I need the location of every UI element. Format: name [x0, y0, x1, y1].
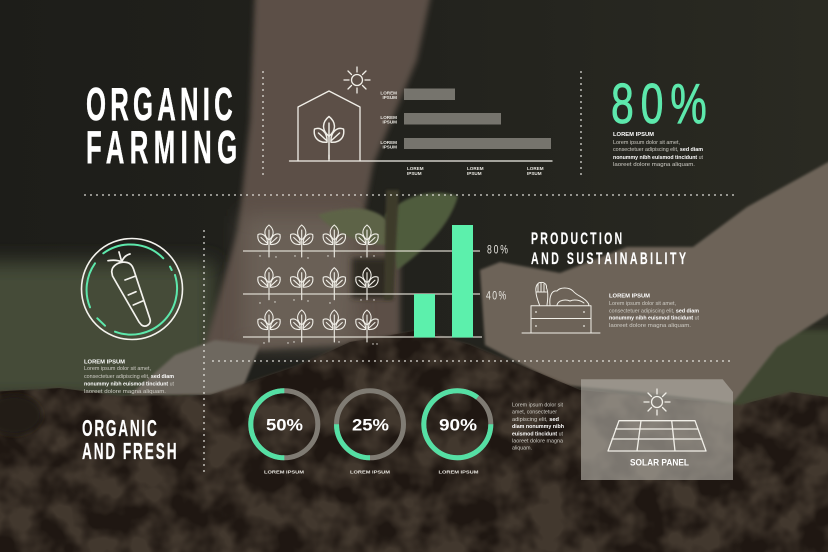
text block: carrot description: nonummy nibh euismod tincidunt ut	[84, 382, 174, 388]
plant rows	[258, 225, 378, 342]
soil dots	[259, 255, 378, 345]
axis labels: IPSUM	[407, 171, 422, 176]
text block: production description: Lorem ipsum dolor sit amet,	[609, 301, 676, 307]
chart: greenhouse horizontal bars	[290, 67, 552, 176]
text block: 80% description: nonummy nibh euismod tincidunt ut	[613, 155, 703, 161]
text block: carrot description	[84, 360, 174, 395]
icon: sun	[644, 389, 670, 415]
text block: solar description: amet, consectetuer	[512, 410, 557, 416]
carrot	[112, 262, 150, 326]
chart: plant pictogram grid with vertical bars	[243, 225, 508, 345]
green dashed ring	[87, 244, 177, 335]
axis labels	[486, 244, 508, 303]
heading: Organic and Fresh	[82, 416, 177, 465]
icon: vegetable crate	[522, 282, 600, 333]
text block: production description	[609, 294, 699, 329]
icon: carrot badge	[82, 238, 182, 340]
text block: solar description	[512, 402, 564, 452]
text block: solar description: euismod tincidunt ut	[512, 431, 563, 437]
bar labels: IPSUM	[382, 120, 397, 124]
heading: Organic and Fresh: ORGANIC	[82, 416, 157, 442]
green bars	[414, 225, 473, 338]
text block: solar description: Lorem ipsum dolor sit	[512, 402, 563, 408]
title: Organic Farming: ORGANIC	[86, 78, 233, 130]
axis labels: IPSUM	[467, 171, 482, 176]
text block: production description: LOREM IPSUM	[609, 294, 650, 300]
text block: production description: consectetuer adipiscing elit, sed diam	[609, 308, 699, 314]
title: Organic Farming: FARMING	[86, 121, 237, 173]
icon: sun	[344, 67, 370, 93]
heading: Production and Sustainability	[531, 228, 686, 268]
text block: solar description: diam nonummy nibh	[512, 424, 564, 430]
axis labels: 40%	[486, 290, 506, 303]
text block: solar description: laoreet dolore magna	[512, 439, 563, 445]
gridlines	[243, 251, 482, 337]
donut: 90%: LOREM IPSUM	[438, 470, 479, 474]
bar labels: IPSUM	[382, 144, 397, 150]
donut: 50%: 50%	[266, 416, 303, 434]
bar labels: LOREM	[380, 90, 397, 96]
panel: solar panel	[581, 379, 733, 480]
text block: solar description: adipiscing elit, sed	[512, 417, 559, 423]
icon: greenhouse with plant	[298, 91, 360, 161]
axis labels: LOREM	[467, 166, 484, 171]
donut: 50%: LOREM IPSUM	[264, 470, 304, 474]
axis labels: LOREM	[527, 166, 544, 171]
text block: 80% description: laoreet dolore magna aliquam.	[613, 162, 695, 168]
donut: 25%	[336, 391, 404, 474]
title: Organic Farming	[86, 78, 237, 173]
panel: solar panel: SOLAR PANEL	[630, 458, 690, 468]
text block: production description: laoreet dolore magna aliquam.	[609, 323, 691, 329]
dotted dividers	[85, 72, 734, 473]
text block: solar description: aliquam.	[512, 446, 532, 452]
horizontal bars	[404, 88, 551, 149]
heading: Organic and Fresh: AND FRESH	[82, 439, 177, 465]
donut: 90%	[424, 391, 491, 474]
text block: 80% description	[613, 132, 703, 168]
axis labels: IPSUM	[527, 171, 542, 176]
text block: 80% description: LOREM IPSUM	[613, 132, 654, 138]
stat: 80%: 80%	[611, 71, 707, 136]
axis labels: LOREM	[407, 166, 424, 171]
bar labels: LOREM	[380, 140, 397, 145]
text block: carrot description: laoreet dolore magna aliquam.	[84, 389, 166, 395]
heading: Production and Sustainability: PRODUCTION	[531, 228, 622, 248]
text block: carrot description: consectetuer adipiscing elit, sed diam	[84, 374, 174, 380]
text block: production description: nonummy nibh euismod tincidunt ut	[609, 316, 699, 322]
donut: 90%: 90%	[439, 416, 477, 434]
donut: 25%: 25%	[352, 416, 389, 434]
bar labels	[380, 90, 397, 150]
text block: 80% description: Lorem ipsum dolor sit amet,	[613, 140, 680, 146]
axis labels: 80%	[487, 244, 508, 257]
bar labels: LOREM	[380, 115, 397, 120]
text block: 80% description: consectetuer adipiscing elit, sed diam	[613, 147, 703, 153]
text block: carrot description: LOREM IPSUM	[84, 360, 125, 366]
axis labels	[407, 166, 544, 176]
heading: Production and Sustainability: AND SUSTAINABILITY	[531, 248, 686, 268]
bar labels: IPSUM	[382, 95, 397, 100]
donut: 50%	[251, 391, 318, 474]
icon: solar grid	[608, 421, 706, 451]
donut: 25%: LOREM IPSUM	[350, 470, 390, 474]
text block: carrot description: Lorem ipsum dolor sit amet,	[84, 366, 151, 372]
